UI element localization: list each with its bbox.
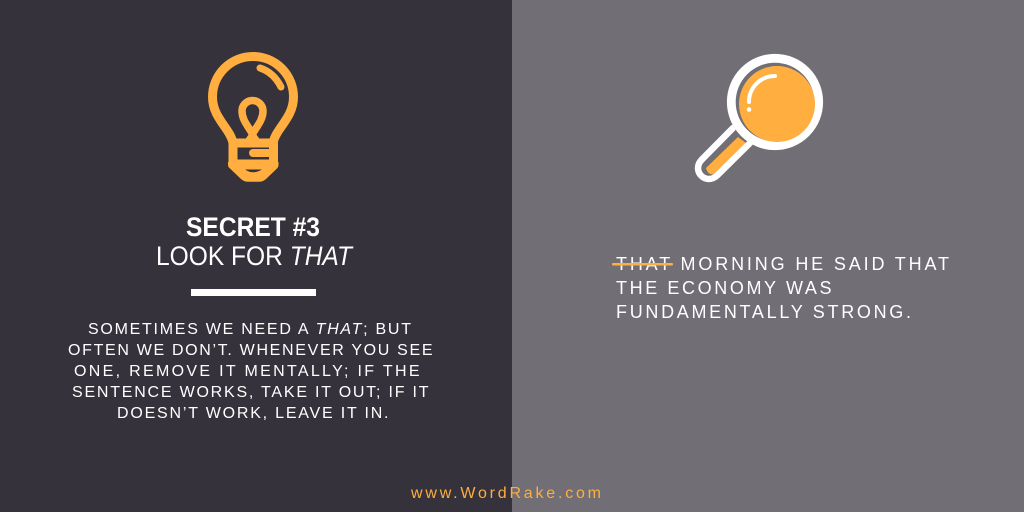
text block: example sentence — [616, 254, 949, 322]
icon: light bulb — [212, 56, 294, 182]
strikethrough on that — [612, 263, 673, 266]
text block: advice: SOMETIMES WE NEED A THAT; BUT — [88, 321, 411, 338]
text block: advice — [68, 321, 432, 422]
panel: right grey background — [512, 0, 1024, 512]
text block: example sentence: FUNDAMENTALLY STRONG. — [616, 302, 911, 322]
text block: advice: OFTEN WE DON’T. WHENEVER YOU SEE — [68, 342, 432, 359]
icon: magnifying glass — [698, 58, 819, 179]
text block: advice: ONE, REMOVE IT MENTALLY; IF THE — [74, 363, 420, 380]
footer: website: www.WordRake.com — [410, 485, 601, 502]
divider bar — [191, 289, 316, 296]
heading: secret number: SECRET #3 — [186, 212, 320, 242]
panel: left dark background — [0, 0, 512, 512]
text block: advice: SENTENCE WORKS, TAKE IT OUT; IF IT — [72, 384, 429, 401]
text block: example sentence: THAT MORNING HE SAID THAT — [616, 254, 949, 274]
text block: example sentence: THE ECONOMY WAS — [616, 278, 832, 298]
heading: look for that: LOOK FOR THAT — [156, 241, 354, 271]
text block: advice: DOESN’T WORK, LEAVE IT IN. — [117, 405, 388, 422]
